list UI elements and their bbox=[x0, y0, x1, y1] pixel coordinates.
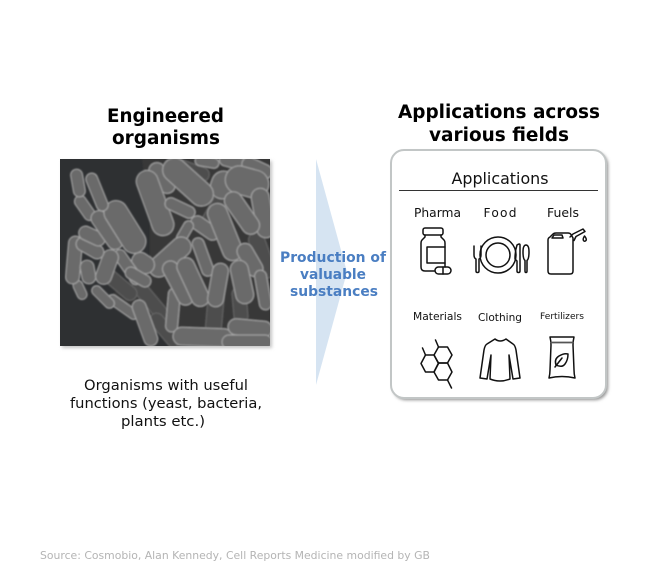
label: food: Food bbox=[484, 206, 516, 220]
label: fuels: Fuels bbox=[547, 206, 579, 220]
arrow: process direction bbox=[316, 159, 347, 385]
heading: applications across various fields: Applications across bbox=[398, 102, 600, 123]
panel title: Applications bbox=[452, 169, 548, 188]
heading: engineered organisms: Engineered bbox=[107, 106, 224, 127]
text block: organisms description bbox=[70, 378, 262, 430]
label: materials: Materials bbox=[413, 310, 462, 323]
icon: long-sleeve shirt bbox=[480, 339, 520, 381]
icon: molecule bbox=[421, 340, 452, 388]
label: pharma: Pharma bbox=[414, 206, 461, 220]
heading: applications across various fields bbox=[398, 102, 600, 146]
panel: applications bbox=[391, 150, 608, 400]
source note: Source: Cosmobio, Alan Kennedy, Cell Reports Medicine modified by GB bbox=[40, 550, 430, 562]
heading: applications across various fields: various fields bbox=[429, 125, 569, 146]
icon: plate and cutlery bbox=[474, 237, 529, 273]
icon: fertilizer bag with leaf bbox=[549, 337, 575, 378]
label: clothing: Clothing bbox=[478, 312, 522, 324]
label: production of valuable substances bbox=[280, 250, 387, 300]
text block: organisms description: functions (yeast, bacteria, bbox=[70, 396, 262, 412]
icon: fuel canister bbox=[548, 229, 586, 274]
label: production of valuable substances: Production of bbox=[280, 250, 387, 266]
label: production of valuable substances: valuable bbox=[300, 267, 366, 283]
heading: engineered organisms bbox=[107, 106, 224, 149]
photo: bacteria micrograph bbox=[60, 153, 278, 350]
icon: medicine bottle and pill bbox=[421, 228, 451, 274]
heading: engineered organisms: organisms bbox=[112, 128, 220, 149]
label: production of valuable substances: substances bbox=[290, 284, 378, 300]
text block: organisms description: Organisms with useful bbox=[84, 378, 248, 394]
label: fertilizers: Fertilizers bbox=[540, 312, 584, 322]
text block: organisms description: plants etc.) bbox=[121, 414, 205, 430]
